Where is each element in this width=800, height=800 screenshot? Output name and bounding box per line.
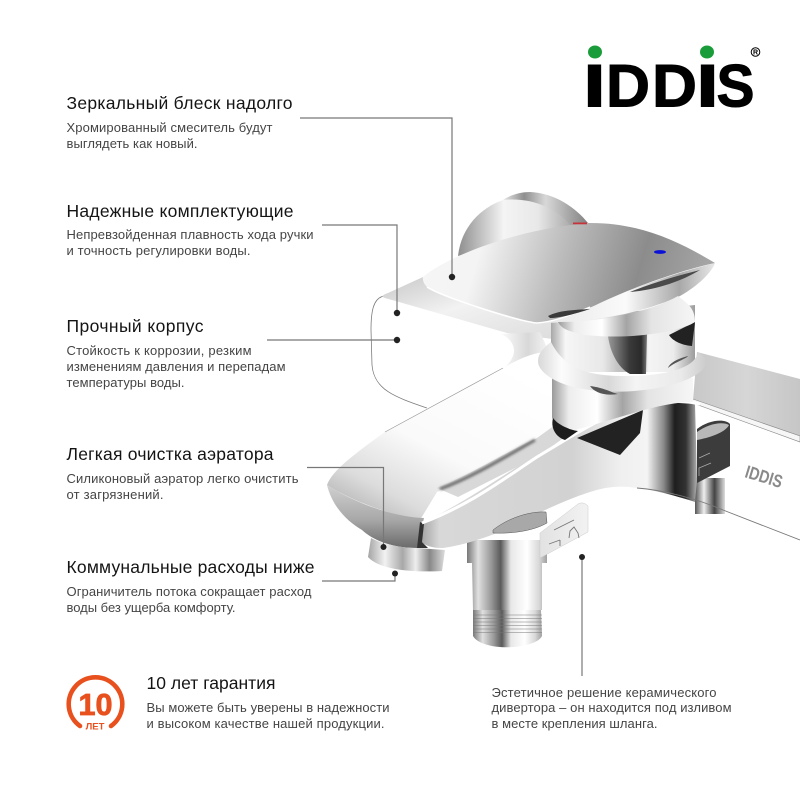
leader line: diverter xyxy=(579,554,585,676)
faucet: handle underside xyxy=(537,263,715,323)
logo: IDDIS: D xyxy=(606,52,650,120)
feature text: mirror shine xyxy=(66,93,292,151)
logo: IDDIS: S xyxy=(716,52,754,120)
warranty text: Вы можете быть уверены в надежности xyxy=(146,700,390,715)
faucet: spout collar under column xyxy=(552,418,578,440)
feature text: lower utility costs: Коммунальные расходы ниже xyxy=(66,557,314,577)
diverter description: в месте крепления шланга. xyxy=(492,716,658,731)
handle: blue cold mark xyxy=(654,250,666,254)
feature text: lower utility costs: воды без ущерба комфорту. xyxy=(66,600,236,615)
faucet: lower connector cylinder xyxy=(467,540,547,647)
faucet: top band of body xyxy=(383,277,560,340)
warranty text xyxy=(146,673,390,731)
feature text: easy aerator cleaning xyxy=(66,444,299,502)
feature text: reliable components: Непревзойденная плавность хода ручки xyxy=(66,227,314,242)
warranty text: и высоком качестве нашей продукции. xyxy=(146,716,384,731)
faucet: upper column xyxy=(551,305,695,372)
badge: 10 year warranty xyxy=(69,677,122,732)
faucet: lower column xyxy=(552,378,693,430)
feature text: durable body: Прочный корпус xyxy=(66,316,204,336)
badge: 10 year warranty: 10 xyxy=(78,687,112,722)
faucet: dark triangle reflection xyxy=(577,410,643,455)
feature text: mirror shine: Хромированный смеситель будут xyxy=(66,120,273,135)
logo: IDDIS: I xyxy=(583,52,606,120)
handle: red hot mark xyxy=(573,222,587,224)
feature text: easy aerator cleaning: Легкая очистка аэратора xyxy=(66,444,274,464)
faucet: white curved blade xyxy=(422,400,700,523)
faucet: body lower outline xyxy=(637,488,800,540)
feature text: easy aerator cleaning: Силиконовый аэратор легко очистить xyxy=(66,471,299,486)
diverter lever xyxy=(540,503,588,558)
logo: IDDIS xyxy=(583,46,760,120)
faucet: spout front face xyxy=(327,485,424,548)
feature text: durable body: изменениям давления и перепадам xyxy=(66,359,286,374)
feature text: easy aerator cleaning: от загрязнений. xyxy=(66,487,164,502)
faucet: spout upper surface xyxy=(327,352,575,520)
faucet: collar dark notch xyxy=(669,322,695,346)
feature text: mirror shine: выглядеть как новый. xyxy=(66,136,198,151)
faucet: right arm xyxy=(690,352,800,442)
faucet: lower spout body xyxy=(420,402,697,548)
aerator xyxy=(368,538,445,571)
faucet: lever handle xyxy=(423,222,715,323)
leader line: flow limiter xyxy=(322,570,398,581)
faucet: rear pipe and dark clamp xyxy=(695,421,730,514)
logo: IDDIS: R xyxy=(753,50,758,57)
feature text: reliable components: и точность регулировки воды. xyxy=(66,243,250,258)
feature text: durable body: температуры воды. xyxy=(66,375,184,390)
faucet: diverter seat xyxy=(493,512,547,533)
diverter description xyxy=(492,685,732,731)
feature text: mirror shine: Зеркальный блеск надолго xyxy=(66,93,292,113)
logo: IDDIS: I xyxy=(696,52,719,120)
leader line: aerator xyxy=(307,468,386,550)
badge: 10 year warranty: ЛЕТ xyxy=(86,722,105,732)
warranty text: 10 лет гарантия xyxy=(146,673,276,693)
product logo on faucet: IDDIS xyxy=(743,462,785,492)
faucet: rear shell behind handle xyxy=(458,192,588,256)
faucet illustration xyxy=(327,192,800,647)
feature text: reliable components: Надежные комплектующие xyxy=(66,201,294,221)
diverter description: дивертора – он находится под изливом xyxy=(492,700,732,715)
diverter description: Эстетичное решение керамического xyxy=(492,685,716,700)
leader line: mirror shine xyxy=(300,118,455,280)
faucet: dark corner above aerator xyxy=(417,522,428,548)
feature text: reliable components xyxy=(66,201,314,258)
faucet: notch shadow xyxy=(498,332,548,372)
faucet: spout slot xyxy=(437,420,572,497)
faucet: body outline at rear-left xyxy=(371,296,427,408)
faucet: dark curved reflection on column xyxy=(608,334,647,374)
leader line: body xyxy=(267,337,400,343)
leader line: components xyxy=(322,225,400,316)
faucet: handle collar xyxy=(558,296,695,337)
feature text: durable body: Стойкость к коррозии, резким xyxy=(66,343,252,358)
logo: IDDIS: D xyxy=(652,52,697,120)
faucet: ring xyxy=(538,342,706,392)
feature text: lower utility costs xyxy=(66,557,314,615)
feature text: lower utility costs: Ограничитель потока сокращает расход xyxy=(66,584,312,599)
feature text: durable body xyxy=(66,316,286,390)
